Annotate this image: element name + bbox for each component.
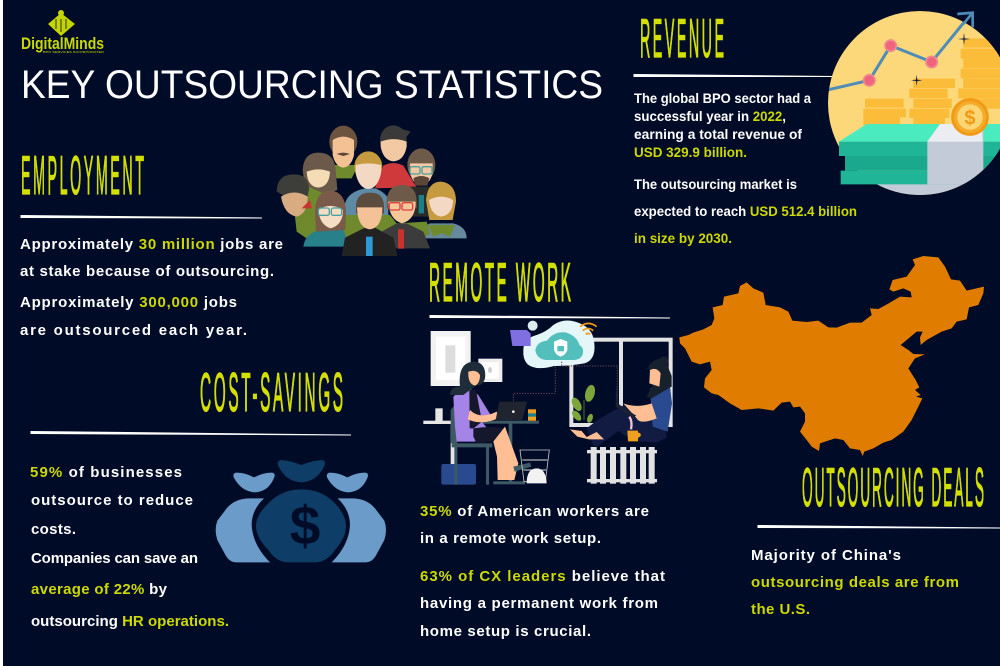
- panel: remote work: [420, 251, 670, 640]
- person: green shirts: [343, 215, 430, 248]
- remote work text: in a remote work setup.: [420, 530, 601, 547]
- heading: outsourcing deals: OUTSOURCING DEALS: [802, 458, 984, 518]
- illustration: remote workers: [423, 321, 672, 485]
- cost-savings text: outsourcing HR operations.: [31, 613, 229, 630]
- revenue text: earning a total revenue of: [634, 126, 802, 142]
- seated woman: [450, 362, 536, 480]
- panel: employment: [20, 145, 283, 339]
- panel: outsourcing deals: [751, 458, 1000, 618]
- person: right glasses man: [407, 148, 448, 217]
- outsourcing deals text: the U.S.: [751, 601, 810, 618]
- employment text: Approximately 300,000 jobs: [20, 294, 237, 311]
- cloud with lock: [510, 321, 597, 368]
- icon: logo diamond: [48, 10, 75, 36]
- heading: employment: EMPLOYMENT: [21, 145, 144, 206]
- center bag: [256, 460, 346, 562]
- coin and chart background: [828, 11, 1000, 195]
- revenue text: USD 329.9 billion.: [634, 144, 747, 160]
- dollar sign: $: [290, 495, 320, 557]
- person: left woman: [302, 153, 337, 233]
- revenue text: expected to reach USD 512.4 billion: [634, 203, 857, 219]
- plant: [570, 384, 597, 424]
- cost-savings text: costs.: [31, 521, 76, 538]
- person: top left man: [329, 126, 358, 178]
- revenue text: [634, 90, 857, 246]
- remote work text: home setup is crucial.: [420, 623, 591, 640]
- network lines: [513, 362, 617, 407]
- left bag: [216, 473, 275, 562]
- employment text: are outsourced each year.: [20, 322, 247, 339]
- remote work text: having a permanent work from: [420, 595, 658, 612]
- waste bin: [520, 450, 549, 483]
- remote work text: 35% of American workers are: [420, 503, 649, 520]
- banknote stack: [839, 100, 1000, 184]
- logo tagline: BPO SERVICES INCORPORATED: [43, 50, 105, 54]
- bag: [441, 464, 476, 485]
- person: front woman with glasses: [303, 191, 347, 247]
- person: top right man: [375, 125, 417, 188]
- woman at window: [570, 356, 672, 446]
- trend arrow tip: [957, 13, 973, 27]
- outsourcing deals text: outsourcing deals are from: [751, 574, 959, 591]
- cost-savings text: 59% of businesses: [30, 464, 182, 481]
- person: center blond: [345, 151, 388, 222]
- map: China: [679, 256, 984, 456]
- wall frames: [431, 331, 502, 386]
- remote work text: [420, 503, 665, 640]
- right bag: [327, 473, 386, 562]
- heading: cost-savings: COST-SAVINGS: [200, 361, 343, 423]
- person: man with red glasses: [377, 185, 430, 249]
- person: front man with blue tie: [342, 193, 398, 256]
- heading: remote work: REMOTE WORK: [429, 251, 571, 313]
- cost-savings text: outsource to reduce: [31, 492, 193, 509]
- icon: money bags: [216, 460, 386, 562]
- cost-savings text: average of 22% by: [31, 581, 168, 598]
- revenue text: successful year in 2022,: [634, 108, 786, 124]
- employment text: [20, 236, 283, 339]
- cost-savings text: Companies can save an: [31, 550, 198, 567]
- panel: revenue: [634, 8, 857, 246]
- logo wordmark: DigitalMinds: [21, 34, 104, 53]
- revenue text: in size by 2030.: [634, 230, 732, 246]
- icon: revenue growth illustration: [828, 11, 1000, 195]
- heading: revenue: REVENUE: [640, 8, 724, 69]
- title: KEY OUTSOURCING STATISTICS: [21, 63, 603, 107]
- revenue text: The outsourcing market is: [634, 176, 797, 192]
- panel: cost-savings: [30, 361, 351, 630]
- cost-savings text: [30, 464, 229, 630]
- outsourcing deals text: [751, 547, 959, 618]
- window: [571, 340, 671, 425]
- logo: [21, 10, 105, 54]
- outsourcing deals text: Majority of China's: [751, 547, 901, 564]
- icon: group of people: [277, 125, 467, 256]
- remote work text: 63% of CX leaders believe that: [420, 568, 665, 585]
- person: right blond woman: [417, 182, 467, 238]
- chair and desk: [451, 405, 539, 485]
- banknote stack: $: [964, 108, 976, 130]
- revenue text: The global BPO sector had a: [634, 90, 811, 106]
- shelf with cups: [423, 408, 455, 464]
- radiator: [587, 447, 657, 484]
- employment text: Approximately 30 million jobs are: [20, 236, 283, 253]
- employment text: at stake because of outsourcing.: [20, 263, 274, 280]
- person: left dark man: [277, 174, 330, 238]
